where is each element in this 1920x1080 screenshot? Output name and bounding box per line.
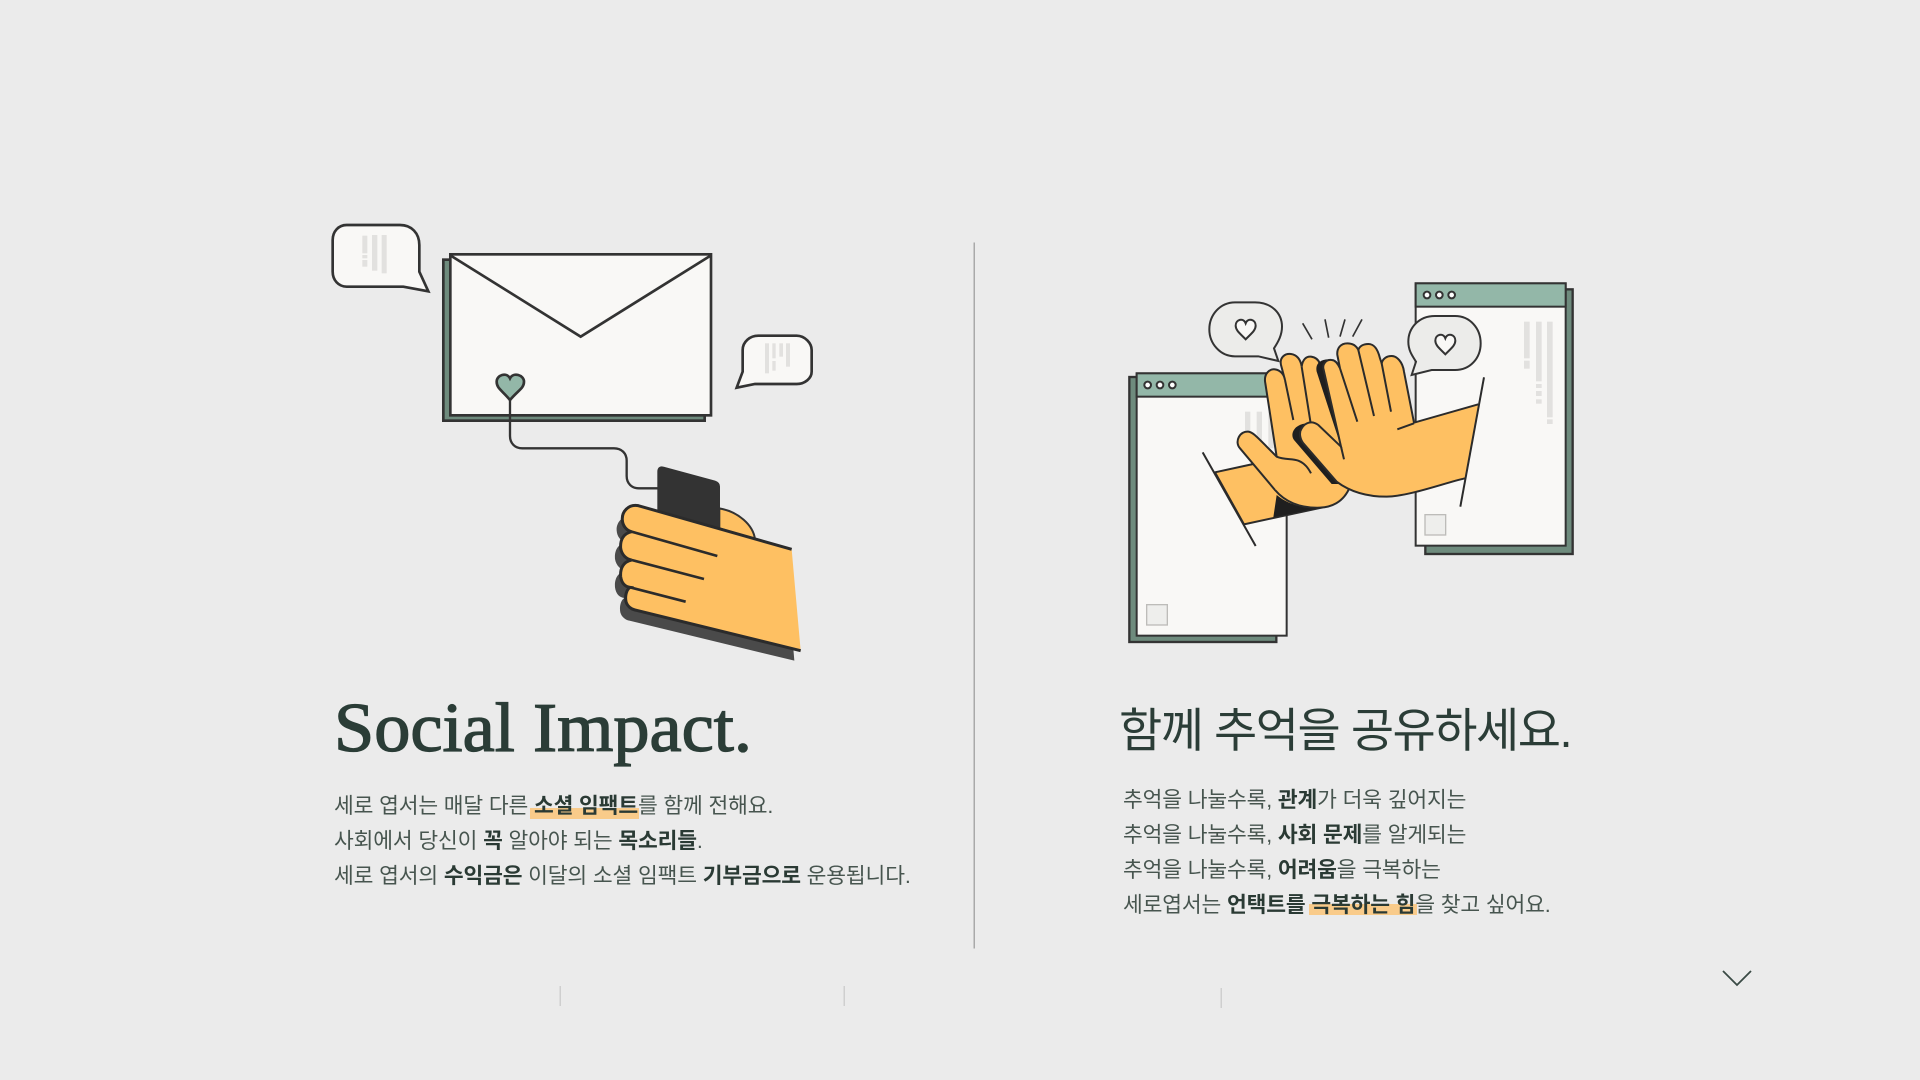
window left (1129, 373, 1287, 642)
hand holding phone (615, 467, 801, 661)
text block: share memories description: 추억을 나눌수록, 사회 문제를 알게되는 (1123, 823, 1466, 847)
speech bubble with heart left (1209, 302, 1282, 361)
title: share memories: 함께 추억을 공유하세요. (1119, 704, 1571, 757)
window right (1416, 283, 1573, 554)
bottom tick marks (560, 986, 1222, 1008)
hand left (1203, 354, 1350, 546)
connecting string (510, 400, 658, 488)
envelope (443, 254, 711, 421)
hand right (1292, 343, 1484, 507)
speech bubble left (333, 225, 428, 291)
divider (974, 242, 975, 948)
text block: share memories description (1123, 788, 1551, 917)
text block: share memories description: 추억을 나눌수록, 관계가 더욱 깊어지는 (1123, 788, 1466, 812)
text block: social impact description: 세로 엽서의 수익금은 이달의 소셜 임팩트 기부금으로 운용됩니다. (334, 864, 911, 888)
speech bubble right (737, 336, 812, 388)
illustration: high five between two windows (1129, 283, 1573, 642)
icon: chevron down (1723, 971, 1751, 985)
speech bubble with heart right (1408, 316, 1481, 375)
icon: heart (497, 375, 524, 400)
text block: share memories description: 세로엽서는 언택트를 극복하는 힘을 찾고 싶어요. (1123, 893, 1551, 917)
highlight: social impact (530, 808, 639, 819)
text block: social impact description: 세로 엽서는 매달 다른 소셜 임팩트를 함께 전해요. (334, 794, 773, 818)
title: Social Impact: Social Impact. (334, 690, 752, 767)
illustration: envelope, phone and hand (333, 225, 812, 661)
clap spark lines (1303, 319, 1362, 339)
text block: social impact description: 사회에서 당신이 꼭 알아야 되는 목소리들. (334, 829, 703, 853)
text block: share memories description: 추억을 나눌수록, 어려움을 극복하는 (1123, 858, 1441, 882)
text block: social impact description (334, 794, 911, 888)
highlight: overcoming power (1309, 904, 1417, 915)
